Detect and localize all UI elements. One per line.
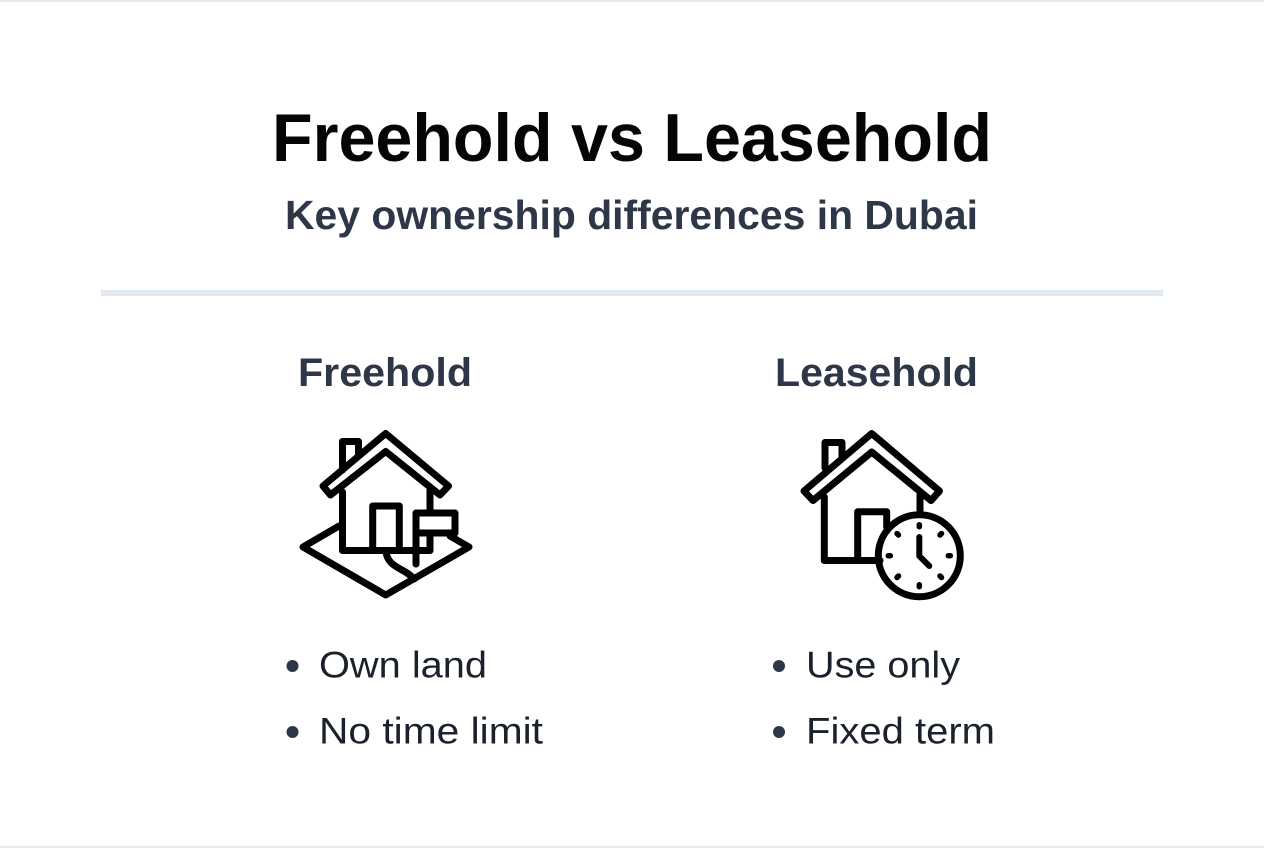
panel: leasehold xyxy=(773,351,995,752)
title: Freehold vs Leasehold xyxy=(272,100,992,176)
bullet list: leasehold: Fixed term xyxy=(806,710,995,752)
bullet list: freehold: No time limit xyxy=(319,710,544,752)
heading: leasehold: Leasehold xyxy=(775,351,978,395)
bullet list: freehold: Own land xyxy=(319,644,487,686)
bullet list: freehold xyxy=(286,644,544,752)
icon: house on land plot with sign xyxy=(303,434,469,595)
bullet list: leasehold: Use only xyxy=(806,644,961,686)
panel: freehold xyxy=(286,351,544,752)
bullet list: leasehold xyxy=(773,644,995,752)
icon: house with clock xyxy=(804,434,960,597)
subtitle: Key ownership differences in Dubai xyxy=(285,192,978,238)
heading: freehold: Freehold xyxy=(298,351,472,395)
